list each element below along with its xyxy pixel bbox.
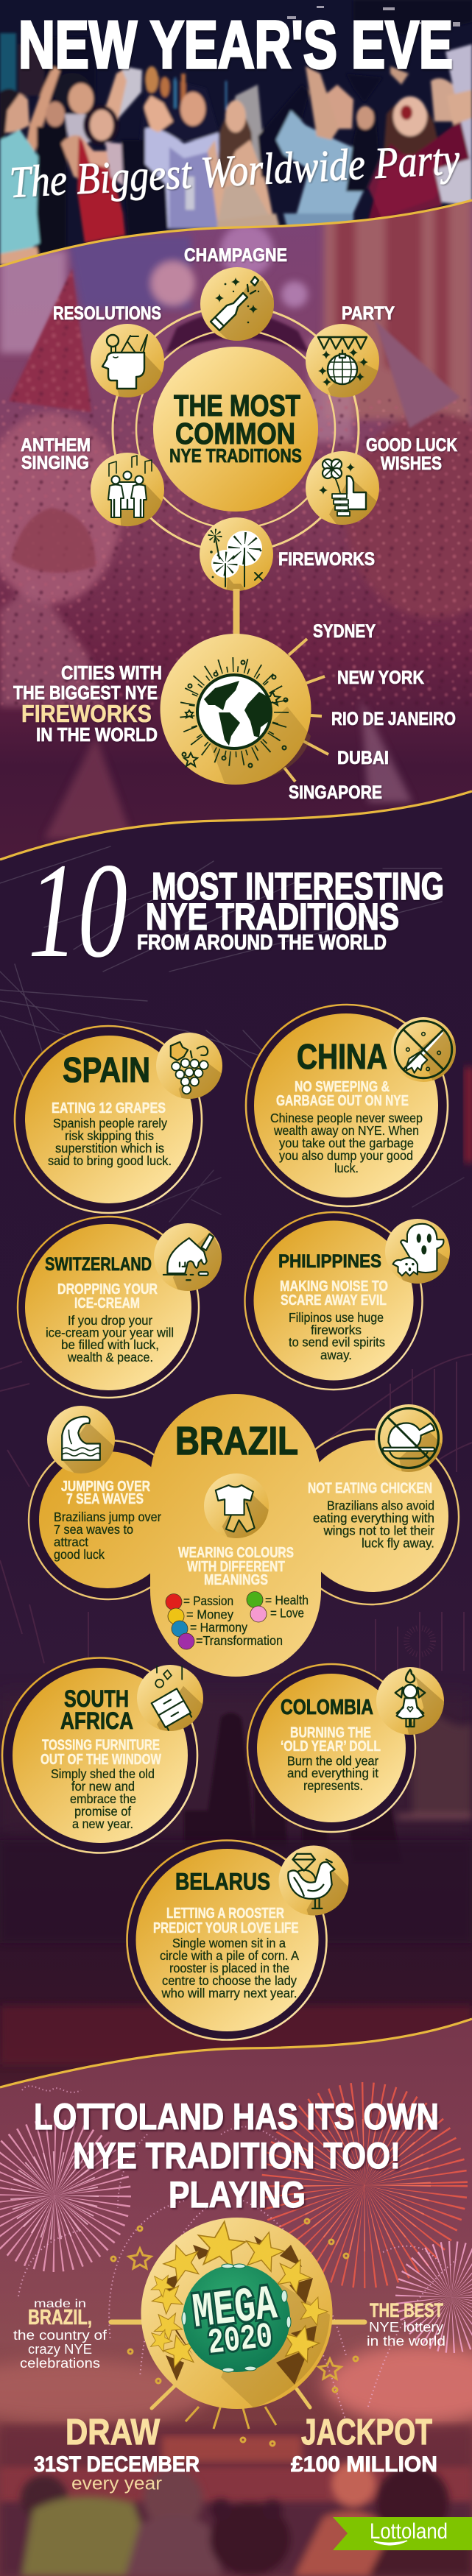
text: Spain: said to bring good luck. xyxy=(48,1153,172,1168)
icon: clothes xyxy=(204,1473,269,1538)
callout: the best: NYE lottery xyxy=(369,2320,443,2335)
cities labels: THE BIGGEST NYE xyxy=(13,682,158,704)
text: Spain: SPAIN xyxy=(63,1051,150,1090)
icon: no sweeping xyxy=(391,1017,456,1082)
panel: China xyxy=(246,1005,462,1206)
icon: doll xyxy=(376,1667,444,1735)
callout: jackpot xyxy=(291,2413,437,2477)
text: Brazil: luck fly away. xyxy=(362,1535,434,1550)
text: South Africa: for new and xyxy=(71,1779,135,1794)
icon: champagne xyxy=(200,267,274,341)
green ball: MEGA xyxy=(190,2276,280,2341)
icon: resolutions xyxy=(91,324,164,397)
cities labels: IN THE WORLD xyxy=(36,723,158,746)
panel: Colombia xyxy=(247,1664,451,1832)
text: Brazil xyxy=(54,1419,434,1588)
text: Colombia: ‘OLD YEAR’ DOLL xyxy=(281,1738,381,1755)
cities labels: FIREWORKS xyxy=(21,700,152,727)
text: Spain: Spanish people rarely xyxy=(53,1116,167,1130)
callout: made in Brazil: celebrations xyxy=(20,2356,100,2371)
cities labels: SYDNEY xyxy=(313,621,376,642)
text: South Africa: embrace the xyxy=(70,1791,136,1806)
text: Brazil: 7 sea waves to xyxy=(54,1522,133,1537)
text: Spain: risk skipping this xyxy=(65,1128,154,1143)
text: Colombia xyxy=(281,1696,381,1793)
cities labels: DUBAI xyxy=(337,748,389,768)
text: China: Chinese people never sweep xyxy=(270,1111,423,1125)
colour legend: = Health xyxy=(265,1593,309,1607)
text: China: CHINA xyxy=(297,1038,387,1077)
rings xyxy=(113,306,359,552)
callout: draw: DRAW xyxy=(66,2413,161,2452)
text: China: NO SWEEPING & xyxy=(295,1079,390,1095)
text: South Africa: promise of xyxy=(74,1804,131,1819)
text: Philippines: MAKING NOISE TO xyxy=(280,1278,388,1295)
colour legend: = Harmony xyxy=(190,1620,247,1635)
text: Spain: EATING 12 GRAPES xyxy=(52,1100,166,1117)
flower shape xyxy=(39,1394,448,1677)
central labels: WISHES xyxy=(381,453,442,474)
panel: Spain xyxy=(15,1026,229,1213)
callout: draw: 31ST DECEMBER xyxy=(34,2452,200,2477)
text: Belarus: centre to choose the lady xyxy=(162,1973,297,1988)
heading: 10 most interesting: 10 xyxy=(28,835,127,986)
text: Belarus: circle with a pile of corn. A xyxy=(160,1948,299,1963)
icon: globe with fireworks xyxy=(161,634,311,785)
burst stars xyxy=(144,2218,331,2385)
icon: anthem singing xyxy=(91,453,164,526)
text: Switzerland xyxy=(45,1254,174,1365)
badge circle xyxy=(141,2218,333,2409)
gold wave dividers xyxy=(0,200,472,2087)
icon: wave xyxy=(47,1406,115,1473)
central labels: RESOLUTIONS xyxy=(53,303,161,324)
icon: good luck xyxy=(306,451,379,525)
text: Brazil: BRAZIL xyxy=(175,1419,298,1463)
text: South Africa: Simply shed the old xyxy=(51,1766,155,1781)
central labels: ANTHEM xyxy=(21,435,91,456)
icon: furniture xyxy=(137,1665,203,1731)
text: South Africa: OUT OF THE WINDOW xyxy=(40,1752,161,1768)
text: Belarus xyxy=(153,1868,299,2000)
callout: the best: THE BEST xyxy=(370,2299,443,2321)
central labels: CHAMPAGNE xyxy=(184,245,287,266)
icon: ghosts xyxy=(385,1219,450,1284)
callout: jackpot: £100 MILLION xyxy=(291,2452,437,2477)
central labels: FIREWORKS xyxy=(278,549,375,570)
callout: made in Brazil: crazy NYE xyxy=(28,2342,92,2357)
colour legend: = Love xyxy=(270,1606,304,1621)
text: China: wealth away on NYE. When xyxy=(273,1123,419,1138)
text: Colombia: BURNING THE xyxy=(290,1725,371,1741)
heading: 10 most interesting xyxy=(28,835,444,986)
central labels xyxy=(21,245,457,570)
cities labels: CITIES WITH xyxy=(61,662,162,684)
text: China: GARBAGE OUT ON NYE xyxy=(276,1093,409,1109)
heading: lottoland tradition: NYE TRADITION TOO! xyxy=(73,2135,401,2176)
green ball xyxy=(182,2264,291,2372)
callout: the best xyxy=(367,2299,445,2349)
heading: lottoland tradition xyxy=(34,2096,439,2215)
central labels: SINGING xyxy=(21,453,89,473)
icon: grapes xyxy=(156,1033,222,1099)
icon: no chicken xyxy=(375,1404,443,1472)
text: Brazil: Brazilians also avoid xyxy=(327,1498,434,1513)
text: Brazil: 7 SEA WAVES xyxy=(66,1491,144,1507)
panel: Switzerland xyxy=(18,1217,228,1398)
text: Philippines xyxy=(278,1251,388,1362)
text: Brazil: MEANINGS xyxy=(204,1572,268,1588)
text: Brazil: NOT EATING CHICKEN xyxy=(308,1481,432,1497)
text: Philippines: away. xyxy=(320,1348,352,1362)
text: Belarus: BELARUS xyxy=(175,1868,270,1894)
background: party photo header xyxy=(0,0,472,272)
text: South Africa: TOSSING FURNITURE xyxy=(42,1737,160,1753)
text: Philippines: PHILIPPINES xyxy=(278,1251,381,1272)
text: Belarus: PREDICT YOUR LOVE LIFE xyxy=(153,1920,299,1936)
connector lines xyxy=(236,589,328,782)
text: Colombia: represents. xyxy=(303,1778,363,1793)
text: Switzerland: ICE-CREAM xyxy=(74,1295,140,1312)
text: Spain xyxy=(48,1051,172,1168)
heading: 10 most interesting: NYE TRADITIONS xyxy=(146,896,399,938)
text: Philippines: Filipinos use huge xyxy=(289,1310,384,1325)
background: ten traditions panel xyxy=(0,846,472,2086)
callout: made in Brazil xyxy=(13,2298,108,2371)
spokes and decorations xyxy=(111,2322,364,2408)
panel: Philippines xyxy=(244,1212,457,1390)
callout: draw: every year xyxy=(71,2474,162,2494)
Lottoland logo banner xyxy=(333,2517,472,2550)
central circle xyxy=(153,347,318,512)
colour legend: =Transformation xyxy=(196,1633,283,1648)
text: Colombia: and everything it xyxy=(287,1766,378,1780)
background: party traditions panel xyxy=(0,184,472,868)
text: Spain: superstition which is xyxy=(55,1141,164,1156)
text: Brazil: attract xyxy=(54,1535,88,1549)
colour legend xyxy=(166,1591,309,1649)
text: Belarus: Single women sit in a xyxy=(172,1936,286,1950)
callout: draw xyxy=(34,2413,200,2494)
text: Brazil: Brazilians jump over xyxy=(54,1510,161,1524)
text: China xyxy=(270,1038,423,1175)
text: Brazil: WEARING COLOURS xyxy=(178,1545,294,1561)
text: Colombia: COLOMBIA xyxy=(281,1696,373,1719)
text: China: luck. xyxy=(334,1161,359,1175)
text: China: you take out the garbage xyxy=(279,1136,414,1150)
callout: made in Brazil: BRAZIL, xyxy=(28,2306,92,2329)
panel: cities with fireworks xyxy=(13,589,456,803)
callout: made in Brazil: the country of xyxy=(13,2328,108,2343)
text: Switzerland: If you drop your xyxy=(68,1313,152,1328)
icon: party xyxy=(306,324,379,397)
side rings xyxy=(29,1429,459,1604)
heading: 10 most interesting: FROM AROUND THE WORLD xyxy=(137,931,387,955)
heading: lottoland tradition: PLAYING xyxy=(169,2174,306,2215)
panel: Mega 2020 badge xyxy=(111,2218,364,2446)
colour legend: = Money xyxy=(186,1607,233,1622)
text: Philippines: fireworks xyxy=(311,1323,362,1337)
text: South Africa: AFRICA xyxy=(60,1708,133,1734)
text: Switzerland: ice-cream your year will xyxy=(46,1325,174,1340)
text: Philippines: to send evil spirits xyxy=(289,1335,385,1350)
icon: ice-cream xyxy=(154,1223,222,1291)
callout: jackpot: JACKPOT xyxy=(301,2413,432,2452)
callout: the best: in the world xyxy=(367,2334,445,2349)
background: closing fireworks panel xyxy=(0,1987,472,2576)
panel: South Africa xyxy=(2,1657,210,1853)
text: Switzerland: DROPPING YOUR xyxy=(57,1281,158,1298)
panel: Brazil xyxy=(29,1394,459,1677)
text: Brazil: JUMPING OVER xyxy=(61,1479,150,1495)
text: Brazil: good luck xyxy=(54,1547,105,1562)
colour legend: = Passion xyxy=(183,1593,233,1608)
central labels: PARTY xyxy=(342,303,395,324)
text: Switzerland: SWITZERLAND xyxy=(45,1254,152,1275)
text: Belarus: rooster is placed in the xyxy=(169,1961,289,1975)
text: Belarus: who will marry next year. xyxy=(161,1986,297,2000)
cities labels: NEW YORK xyxy=(337,668,424,688)
text: Philippines: SCARE AWAY EVIL xyxy=(281,1292,387,1309)
panel: most common traditions xyxy=(21,245,457,598)
cities labels: SINGAPORE xyxy=(289,782,382,803)
text: China: you also dump your good xyxy=(279,1148,413,1163)
callout: made in Brazil: made in xyxy=(34,2298,86,2310)
cities labels xyxy=(13,621,456,803)
text: Brazil: eating everything with xyxy=(313,1510,434,1525)
text: Switzerland: wealth & peace. xyxy=(67,1350,153,1365)
panel: Belarus xyxy=(127,1840,356,2040)
green ball: 2020 xyxy=(206,2317,275,2364)
Lottoland logo banner: Lottoland xyxy=(370,2519,448,2544)
text: South Africa: a new year. xyxy=(72,1816,133,1831)
text: Colombia: Burn the old year xyxy=(287,1753,378,1768)
text: South Africa: SOUTH xyxy=(64,1685,129,1712)
central circle: NYE TRADITIONS xyxy=(169,445,302,467)
icon: fireworks xyxy=(200,517,273,598)
icon: rooster and ring xyxy=(278,1846,349,1915)
text: Belarus: LETTING A ROOSTER xyxy=(166,1906,284,1922)
text: South Africa xyxy=(40,1685,161,1831)
text: Brazil: wings not to let their xyxy=(323,1524,434,1538)
central circle: COMMON xyxy=(175,417,295,450)
central circle: THE MOST xyxy=(174,389,300,422)
text: Switzerland: be filled with luck, xyxy=(61,1337,159,1352)
text: Brazil: WITH DIFFERENT xyxy=(187,1559,285,1575)
